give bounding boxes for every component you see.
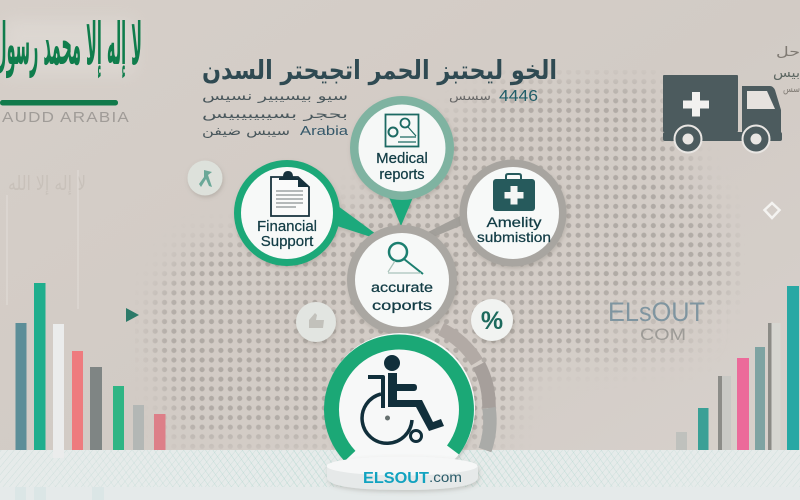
faded frame lines bbox=[7, 170, 78, 309]
arrow marker bbox=[126, 308, 139, 322]
subtitle lines bbox=[202, 89, 348, 139]
label: financial support: Financial bbox=[257, 218, 317, 235]
year label: 4446 bbox=[499, 88, 538, 105]
small icon: percent badge: % bbox=[481, 307, 503, 335]
title: الخو ليحتبز الحمر اتجيحتر السدن bbox=[202, 56, 557, 86]
flag sword bar bbox=[0, 100, 118, 106]
watermark logo: COM bbox=[640, 325, 686, 344]
icon: medical briefcase bbox=[493, 174, 535, 211]
watermark logo bbox=[604, 297, 710, 345]
label: medical reports: Medical bbox=[376, 150, 428, 167]
connector: amenity to accurate bbox=[428, 215, 465, 238]
subtitle lines: سيو بيسيبير نسيس bbox=[202, 89, 348, 104]
brand logo text: ELSOUT bbox=[363, 470, 430, 487]
truck side caption: حل bbox=[776, 45, 800, 60]
icon: medical truck bbox=[663, 75, 782, 152]
pedestal with logo bbox=[326, 456, 478, 490]
brand logo text: .com bbox=[429, 470, 462, 485]
subtitle lines: سيبس ضيفن bbox=[202, 124, 290, 139]
left bar chart bbox=[16, 283, 166, 458]
small icon: leaf badge bbox=[188, 160, 222, 196]
text: لا إله إلا محمد رسول bbox=[0, 10, 142, 79]
floor bbox=[0, 450, 800, 500]
label: medical reports: reports bbox=[379, 167, 425, 183]
label: accurate reports: accurate bbox=[371, 280, 433, 295]
faded calligraphy: لا إله إلا الله bbox=[8, 171, 86, 196]
truck side caption: بيس bbox=[773, 66, 800, 81]
year label: سسس bbox=[449, 90, 491, 103]
icon: report with magnifier bbox=[386, 114, 418, 146]
dotted world map pattern bbox=[135, 70, 745, 450]
brand logo text bbox=[363, 470, 462, 487]
wheelchair gauge bbox=[325, 333, 475, 483]
truck side caption bbox=[773, 45, 800, 95]
icon: magnifier bbox=[388, 243, 423, 274]
outer progress arc bbox=[441, 329, 490, 450]
Saudi flag calligraphy bbox=[0, 10, 142, 106]
panel: medical reports bbox=[350, 96, 454, 236]
label: financial support: Support bbox=[261, 233, 314, 250]
label: amenity submission: Amelity bbox=[486, 214, 542, 230]
small icon: percent badge bbox=[471, 299, 513, 341]
subtitle lines: Arabia bbox=[300, 124, 348, 138]
country label: AUDD ARABIA bbox=[2, 109, 130, 126]
label: accurate reports: coports bbox=[372, 298, 432, 313]
panel: financial support bbox=[234, 160, 376, 266]
small icon: thumb badge bbox=[296, 302, 336, 342]
right bar chart bbox=[676, 286, 799, 450]
label: amenity submission: submistion bbox=[477, 229, 551, 245]
watermark logo: ELsOUT bbox=[608, 297, 705, 327]
icon: wheelchair user bbox=[362, 355, 444, 443]
year label bbox=[449, 88, 538, 105]
panel: amenity submission bbox=[460, 160, 566, 266]
icon: clipboard document bbox=[271, 171, 309, 216]
diamond marker bbox=[764, 203, 780, 218]
panel: accurate reports bbox=[347, 225, 457, 335]
subtitle lines: بحجر بسيبيبيبيس bbox=[202, 107, 348, 122]
